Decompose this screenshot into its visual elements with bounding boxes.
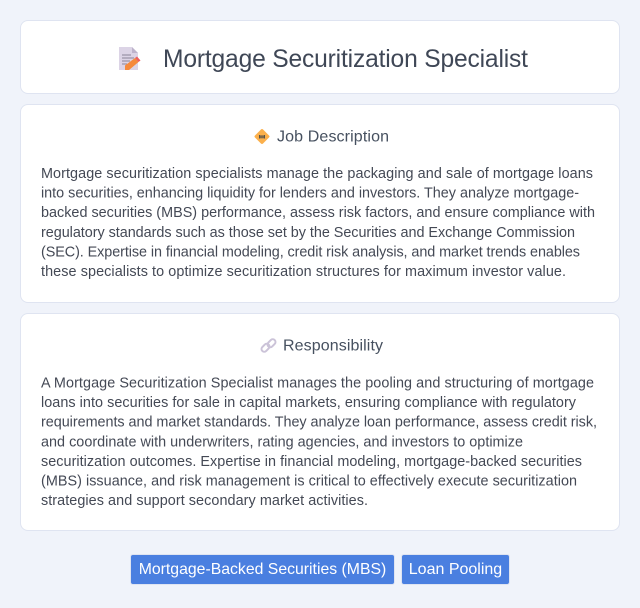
tag: loan pooling xyxy=(402,555,509,584)
tag: loan pooling: Loan Pooling xyxy=(409,561,502,578)
text: responsibility body: and coordinate with underwriters, rating agencies, and investors to optimize xyxy=(41,434,523,450)
text: job description body: (SEC). Expertise in financial modeling, credit risk analysis, and market trends enables xyxy=(41,244,580,260)
icon: document with pencil xyxy=(119,47,140,70)
icon: job description diamond xyxy=(254,129,270,144)
panel: header xyxy=(20,20,620,94)
text: responsibility body: loans into securities for sale in capital markets, ensuring compliance with regulatory xyxy=(41,395,577,411)
text: responsibility body: A Mortgage Securitization Specialist manages the pooling and structuring of mortgage xyxy=(41,376,594,392)
text: job description body: regulatory standards such as those set by the Securities and Exchange Commission xyxy=(41,225,575,241)
text: responsibility body: strategies and support secondary market activities. xyxy=(41,493,368,509)
icon: chain link xyxy=(260,338,276,353)
heading: job description: Job Description xyxy=(277,128,389,146)
panel: job description xyxy=(20,104,620,303)
text: responsibility body: securitization outcomes. Expertise in financial modeling, mortgage-backed securities xyxy=(41,454,582,470)
text: job description body: these specialists to optimize securitization structures for maximum investor value. xyxy=(41,264,566,280)
tag: mortgage-backed securities xyxy=(131,555,394,584)
text: responsibility body: (MBS) issuance, and risk management is critical to effectively execute securitization xyxy=(41,474,577,490)
panel: responsibility xyxy=(20,313,620,531)
text: responsibility body: requirements and market standards. They analyze loan performance, assess credit risk, xyxy=(41,415,597,431)
text: job description body: into securities, enhancing liquidity for lenders and investors. They analyze mortgage- xyxy=(41,186,579,202)
tag: mortgage-backed securities: Mortgage-Backed Securities (MBS) xyxy=(139,561,386,578)
heading: responsibility: Responsibility xyxy=(283,338,383,354)
text: job description body: backed securities (MBS) performance, assess risk factors, and ensure compliance with xyxy=(41,205,595,221)
text: job description body: Mortgage securitization specialists manage the packaging and sale of mortgage loans xyxy=(41,166,593,182)
title: Mortgage Securitization Specialist xyxy=(163,46,528,73)
